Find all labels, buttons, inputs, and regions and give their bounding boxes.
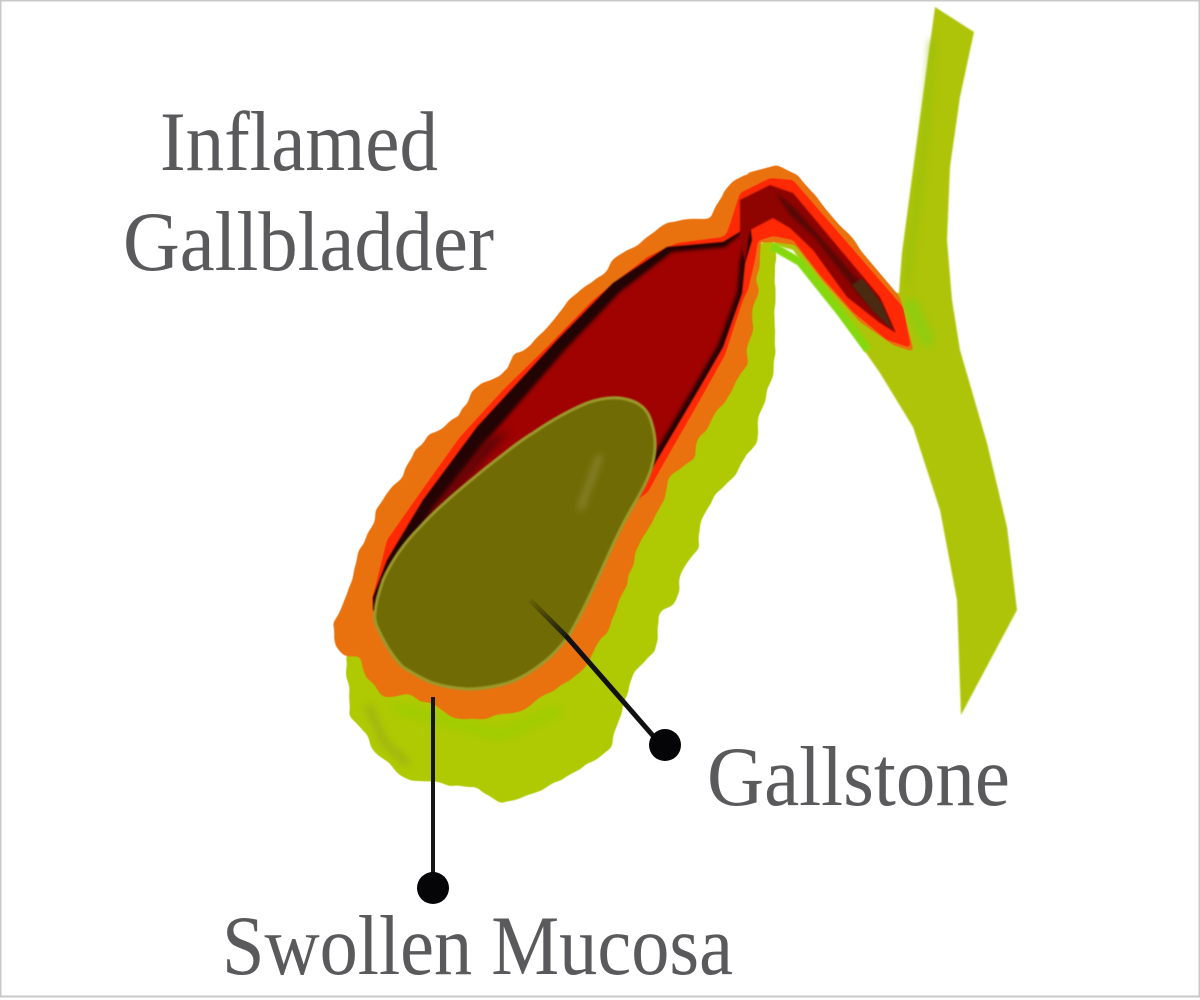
label: Swollen Mucosa: Swollen Mucosa [222,899,733,993]
leader line: swollen mucosa [417,697,449,904]
heading: Inflamed Gallbladder [123,95,494,289]
heading: Inflamed Gallbladder: Inflamed [160,95,438,189]
bladder lumen [373,185,896,640]
label: Gallstone: Gallstone [707,730,1010,824]
swollen mucosa [345,240,868,805]
inflamed neck wall [740,165,914,352]
inflamed outer wall [335,167,900,720]
bile duct [770,7,1017,715]
inflamed red wall [372,178,911,640]
leader line: gallstone [530,600,681,761]
gallstone [375,398,655,689]
heading: Inflamed Gallbladder: Gallbladder [123,195,494,289]
